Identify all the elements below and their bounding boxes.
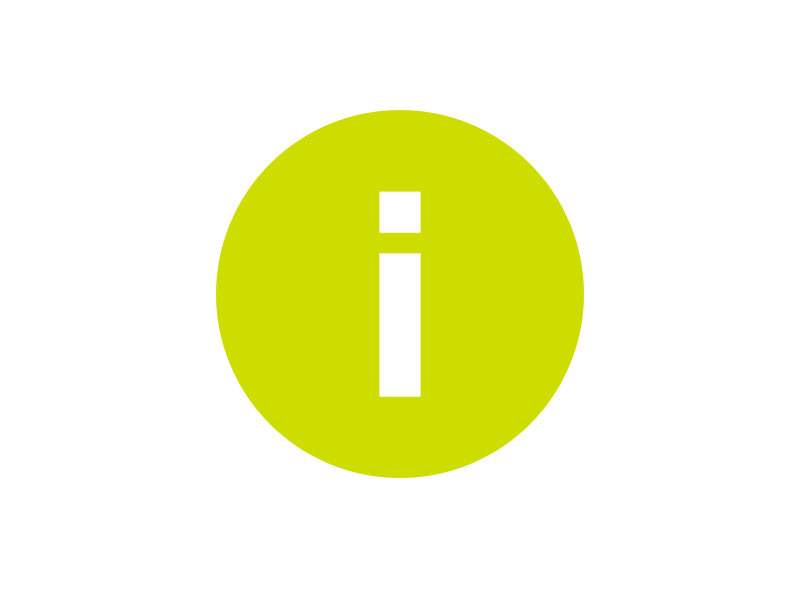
letter i dot [379,192,421,233]
icon background circle [216,110,584,478]
letter i stem [379,253,421,397]
